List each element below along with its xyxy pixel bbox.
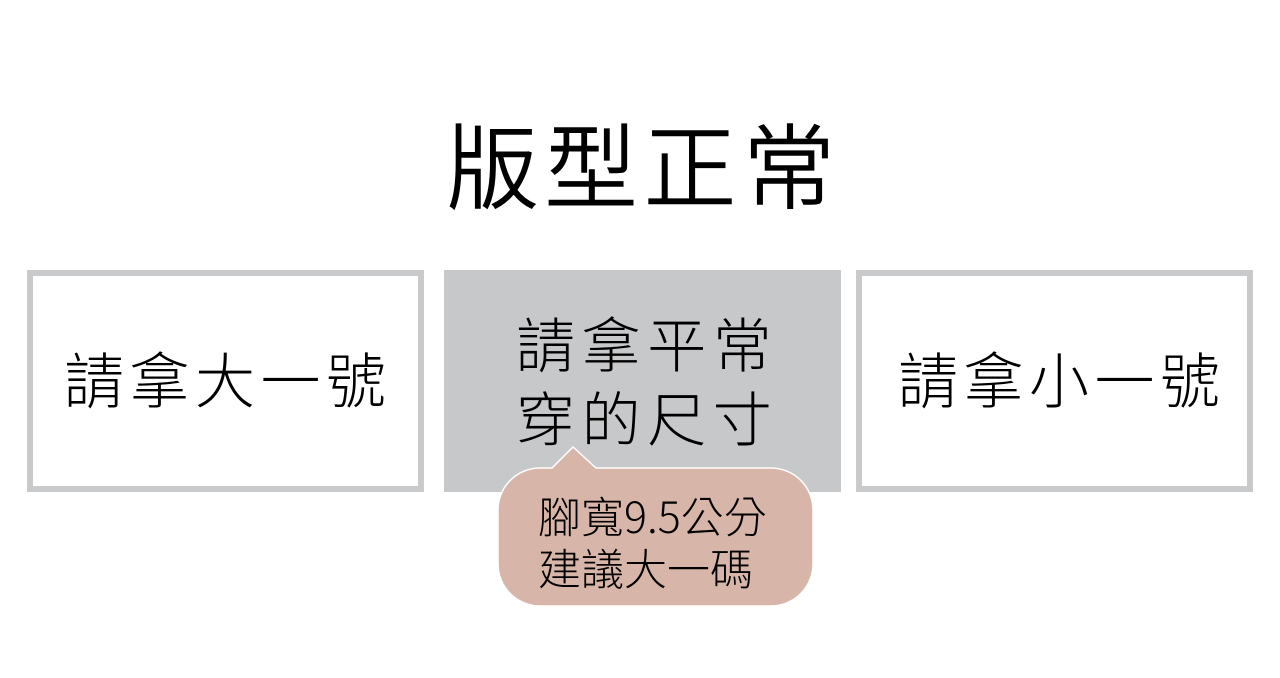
label: size down: 請拿小一號 bbox=[898, 334, 1226, 421]
title: 版型正常 bbox=[446, 95, 842, 228]
callout bbox=[498, 447, 813, 606]
callout text: 腳寬9.5公分 bbox=[538, 484, 767, 546]
panel: size up bbox=[30, 273, 421, 489]
callout text: 建議大一碼 bbox=[538, 536, 753, 598]
panel: regular size bbox=[444, 270, 841, 492]
label: regular size: 請拿平常 bbox=[516, 299, 778, 384]
label: regular size: 穿的尺寸 bbox=[516, 373, 778, 458]
label: size up: 請拿大一號 bbox=[64, 334, 392, 421]
panel: size down bbox=[859, 273, 1250, 489]
